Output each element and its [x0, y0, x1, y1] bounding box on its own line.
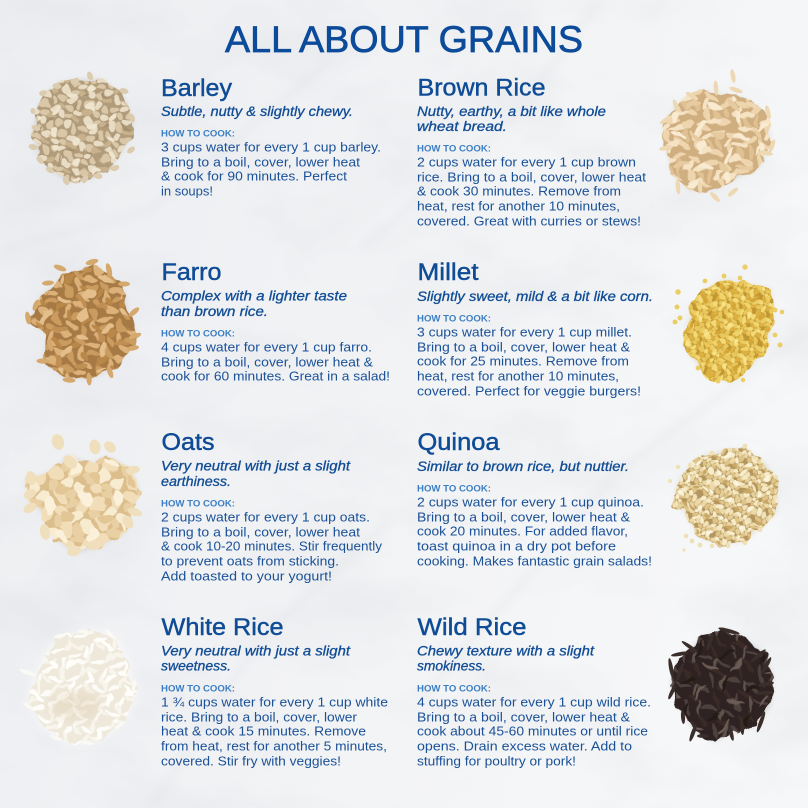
instructions: Bring to a boil, cover, lower heat &	[161, 355, 373, 370]
tagline: Subtle, nutty & slightly chewy.	[161, 104, 353, 119]
instructions: heat, rest for another 10 minutes,	[417, 369, 619, 384]
instructions: 3 cups water for every 1 cup millet.	[417, 325, 632, 340]
heading: Wild Rice	[418, 614, 526, 641]
tagline: Slightly sweet, mild & a bit like corn.	[417, 289, 653, 304]
panel: wild rice	[417, 614, 774, 769]
how to cook label: HOW TO COOK:	[417, 144, 491, 154]
instructions	[417, 695, 651, 769]
instructions: cook for 25 minutes. Remove from	[417, 354, 629, 369]
instructions: rice. Bring to a boil, cover, lower heat	[417, 170, 646, 185]
tagline: Very neutral with just a slight	[161, 644, 351, 659]
instructions: cook about 45-60 minutes or until rice	[417, 724, 648, 739]
panel: barley	[28, 71, 381, 199]
tagline: Chewy texture with a slight	[417, 644, 595, 659]
instructions: Bring to a boil, cover, lower heat	[161, 525, 360, 540]
instructions: heat & cook 15 minutes. Remove	[161, 724, 366, 739]
instructions: 3 cups water for every 1 cup barley.	[161, 140, 381, 155]
panel: white rice	[19, 614, 388, 769]
instructions: stuffing for poultry or pork!	[417, 754, 576, 769]
tagline: Nutty, earthy, a bit like whole	[417, 104, 606, 119]
instructions: opens. Drain excess water. Add to	[417, 739, 632, 754]
heading: Barley	[161, 75, 232, 102]
instructions: cook for 60 minutes. Great in a salad!	[161, 369, 390, 384]
tagline	[161, 644, 351, 674]
heading: Quinoa	[418, 429, 500, 456]
instructions: Bring to a boil, cover, lower heat	[161, 155, 360, 170]
instructions: cooking. Makes fantastic grain salads!	[417, 554, 652, 569]
panel: quinoa	[417, 429, 778, 569]
instructions: Bring to a boil, cover, lower heat &	[417, 710, 630, 725]
heading: Farro	[162, 259, 222, 286]
how to cook label: HOW TO COOK:	[161, 499, 235, 509]
instructions: covered. Stir fry with veggies!	[161, 754, 341, 769]
instructions: Bring to a boil, cover, lower heat &	[417, 510, 630, 525]
instructions	[161, 140, 381, 199]
instructions: toast quinoa in a dry pot before	[417, 539, 616, 554]
tagline: earthiness.	[161, 474, 231, 489]
panel: oats	[22, 429, 383, 584]
instructions	[161, 340, 390, 384]
instructions: from heat, rest for another 5 minutes,	[161, 739, 387, 754]
instructions: to prevent oats from sticking.	[161, 554, 339, 569]
instructions	[417, 495, 652, 569]
icon: barley pile	[28, 71, 136, 186]
heading: Brown Rice	[418, 74, 546, 102]
tagline: wheat bread.	[417, 119, 507, 134]
instructions: heat, rest for another 10 minutes,	[417, 199, 620, 214]
instructions: 2 cups water for every 1 cup brown	[417, 155, 636, 170]
icon: farro pile	[24, 258, 142, 386]
instructions: covered. Great with curries or stews!	[417, 214, 641, 229]
title: ALL ABOUT GRAINS	[225, 19, 583, 60]
icon: brown rice pile	[659, 69, 777, 203]
icon: white rice pile	[19, 627, 137, 746]
instructions: cook 20 minutes. For added flavor,	[417, 524, 628, 539]
tagline: than brown rice.	[161, 304, 268, 319]
instructions: & cook for 90 minutes. Perfect	[161, 169, 347, 184]
instructions: 4 cups water for every 1 cup wild rice.	[417, 695, 651, 710]
instructions	[417, 155, 646, 229]
how to cook label: HOW TO COOK:	[417, 684, 491, 694]
icon: quinoa pile	[668, 444, 778, 552]
icon: millet pile	[672, 264, 784, 383]
tagline: sweetness.	[161, 659, 231, 674]
tagline: Very neutral with just a slight	[161, 459, 351, 474]
instructions: in soups!	[161, 184, 213, 199]
how to cook label: HOW TO COOK:	[417, 314, 491, 324]
tagline: Similar to brown rice, but nuttier.	[417, 459, 629, 474]
tagline: smokiness.	[417, 659, 486, 674]
instructions: & cook 10-20 minutes. Stir frequently	[161, 539, 383, 554]
tagline: Complex with a lighter taste	[161, 289, 347, 304]
tagline	[417, 644, 595, 674]
instructions	[417, 325, 641, 399]
instructions: & cook 30 minutes. Remove from	[417, 184, 621, 199]
panel: millet	[417, 259, 784, 399]
instructions: 2 cups water for every 1 cup quinoa.	[417, 495, 644, 510]
instructions: covered. Perfect for veggie burgers!	[417, 384, 641, 399]
panel: farro	[24, 258, 390, 386]
icon: oats pile	[22, 433, 143, 558]
instructions: rice. Bring to a boil, cover, lower	[161, 710, 358, 725]
how to cook label: HOW TO COOK:	[161, 329, 235, 339]
instructions: Add toasted to your yogurt!	[161, 569, 332, 584]
instructions: 1 ¾ cups water for every 1 cup white	[161, 695, 388, 710]
heading: White Rice	[162, 614, 284, 641]
icon: wild rice pile	[667, 626, 774, 742]
heading: Oats	[162, 429, 214, 456]
instructions: Bring to a boil, cover, lower heat &	[417, 340, 630, 355]
how to cook label: HOW TO COOK:	[161, 684, 235, 694]
tagline	[161, 459, 351, 489]
instructions	[161, 695, 388, 769]
tagline	[161, 289, 347, 319]
instructions	[161, 510, 383, 584]
how to cook label: HOW TO COOK:	[161, 128, 235, 138]
instructions: 2 cups water for every 1 cup oats.	[161, 510, 370, 525]
instructions: 4 cups water for every 1 cup farro.	[161, 340, 372, 355]
panel: brown rice	[417, 69, 777, 229]
how to cook label: HOW TO COOK:	[417, 484, 491, 494]
tagline	[417, 104, 606, 134]
heading: Millet	[418, 259, 479, 286]
